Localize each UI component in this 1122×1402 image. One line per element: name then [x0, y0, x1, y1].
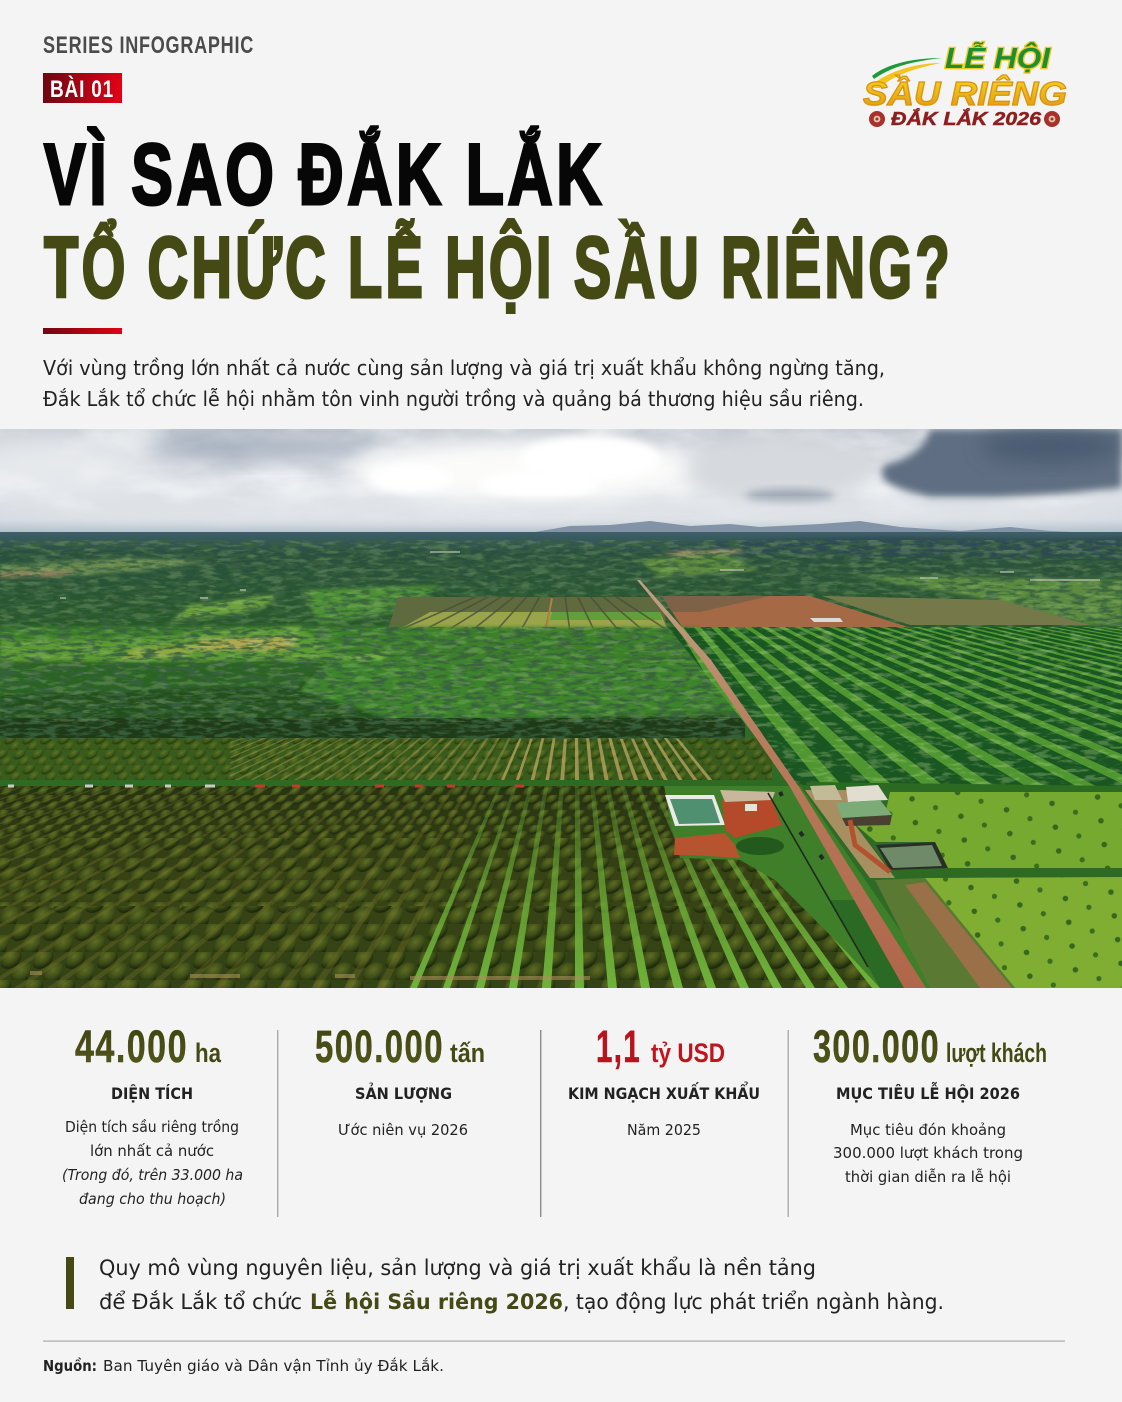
- dark distant ridge: [600, 537, 1122, 558]
- number: 1,1: [596, 1021, 641, 1072]
- number: 44.000: [75, 1021, 188, 1072]
- bright green field lower: [925, 876, 1122, 988]
- intro paragraph: Đắk Lắk tổ chức lễ hội nhằm tôn vinh người trồng và quảng bá thương hiệu sầu riêng.: [43, 387, 864, 411]
- logo flower left: [869, 111, 885, 127]
- orchard bottom fence: [30, 973, 590, 978]
- callout text: Quy mô vùng nguyên liệu, sản lượng và giá trị xuất khẩu là nền tảng: [99, 1256, 816, 1281]
- divider 1: [277, 1030, 278, 1217]
- green hedge line: [0, 780, 772, 784]
- hedge between fields: [932, 868, 1122, 878]
- callout text: Lễ hội Sầu riêng 2026: [310, 1290, 563, 1315]
- number: 500.000: [315, 1021, 444, 1072]
- label: DIỆN TÍCH: [111, 1083, 193, 1103]
- description: Mục tiêu đón khoảng: [850, 1121, 1006, 1139]
- forest texture: [0, 627, 772, 739]
- description: đang cho thu hoạch): [79, 1190, 226, 1208]
- description: Năm 2025: [627, 1121, 701, 1139]
- sky with clouds: [0, 429, 1122, 535]
- far field patches: [0, 549, 1122, 625]
- orchard: durian rows: [0, 786, 880, 988]
- dark tree row band: [0, 718, 745, 740]
- green fields band: [0, 624, 702, 664]
- number: tấn: [450, 1038, 485, 1068]
- series label: SERIES INFOGRAPHIC: [43, 32, 254, 59]
- brown ploughed field: [662, 596, 908, 627]
- bright green field upper: [854, 792, 1122, 870]
- cars on road: [780, 792, 823, 859]
- coloured roofs: [255, 784, 524, 788]
- source note: Nguồn:: [43, 1356, 97, 1375]
- label: SẢN LƯỢNG: [355, 1082, 452, 1103]
- far land texture light: [0, 540, 1122, 632]
- road: [637, 580, 926, 988]
- stat: export value: [568, 1021, 760, 1139]
- banana rows field: [668, 627, 1122, 786]
- description: Diện tích sầu riêng trồng: [65, 1118, 239, 1136]
- grass around farm: [660, 786, 940, 988]
- far right stripe field: [822, 596, 1090, 625]
- description: (Trong đó, trên 33.000 ha: [62, 1166, 243, 1184]
- description: Ước niên vụ 2026: [338, 1121, 468, 1139]
- badge: article number: BÀI 01: [50, 75, 114, 103]
- callout bar: [66, 1257, 74, 1309]
- distant land: [0, 532, 1122, 632]
- number: lượt khách: [946, 1038, 1047, 1068]
- pond right: [850, 820, 948, 872]
- logo: Sầu riêng: SẦU RIÊNG: [863, 75, 1067, 112]
- photo: aerial view of durian orchards: [0, 429, 1122, 988]
- description: lớn nhất cả nước: [90, 1142, 214, 1160]
- divider 2: [540, 1030, 541, 1217]
- logo: Lễ hội Sầu riêng Đắk Lắk 2026: [863, 41, 1067, 129]
- red accent bar: [43, 328, 122, 334]
- callout text: để Đắk Lắk tổ chức: [99, 1290, 302, 1315]
- number: [596, 1021, 725, 1072]
- logo flower right: [1044, 111, 1060, 127]
- divider 3: [788, 1030, 789, 1217]
- label: MỤC TIÊU LỄ HỘI 2026: [836, 1082, 1020, 1103]
- intro paragraph: [43, 356, 885, 411]
- logo swoosh: [868, 58, 942, 88]
- base land: [0, 632, 1015, 988]
- description: thời gian diễn ra lễ hội: [845, 1168, 1011, 1186]
- orchard roofs line: [8, 784, 215, 788]
- panel: header: [43, 32, 953, 411]
- panel: key statistics: [62, 1021, 1047, 1217]
- stat: output: [315, 1021, 485, 1139]
- trees at yard: [736, 837, 784, 855]
- stat: area: [62, 1021, 243, 1208]
- tan ground right of road: [805, 790, 895, 878]
- pond left: [665, 795, 725, 826]
- hedge below banana field: [806, 782, 1122, 793]
- distant mountains: [536, 521, 1072, 532]
- callout text: [99, 1256, 944, 1315]
- strip beside road: [875, 878, 1015, 988]
- intro paragraph: Với vùng trồng lớn nhất cả nước cùng sản lượng và giá trị xuất khẩu không ngừng tăng,: [43, 356, 885, 380]
- title: VÌ SAO ĐẮK LẮK: [44, 127, 605, 223]
- callout: conclusion: [66, 1256, 944, 1315]
- stat: festival target: [813, 1021, 1047, 1186]
- logo: Đắk Lắk 2026: ĐẮK LẮK 2026: [891, 108, 1042, 129]
- striped middle field: [389, 597, 668, 630]
- fence line: [768, 793, 868, 967]
- number: tỷ USD: [651, 1038, 725, 1068]
- small orchard band: [0, 738, 772, 780]
- description: [833, 1121, 1023, 1186]
- description: [62, 1118, 243, 1208]
- forest band: [0, 660, 735, 722]
- title: [44, 127, 953, 316]
- divider line: [43, 1340, 1065, 1342]
- soil strip: [905, 882, 1012, 988]
- green strip left of road: [830, 900, 904, 988]
- source note: Ban Tuyên giáo và Dân vận Tỉnh ủy Đắk Lắk.: [103, 1357, 444, 1375]
- red soil yard: [674, 790, 782, 858]
- callout text: , tạo động lực phát triển ngành hàng.: [563, 1290, 944, 1315]
- far village dots: [60, 552, 1100, 598]
- number: ha: [195, 1038, 222, 1068]
- label: KIM NGẠCH XUẤT KHẨU: [568, 1081, 760, 1103]
- description: 300.000 lượt khách trong: [833, 1144, 1023, 1162]
- farmhouse: [810, 785, 892, 826]
- logo: Lễ hội: LỄ HỘI: [945, 41, 1051, 75]
- number: 300.000: [813, 1021, 940, 1072]
- far land texture dark: [0, 540, 1122, 632]
